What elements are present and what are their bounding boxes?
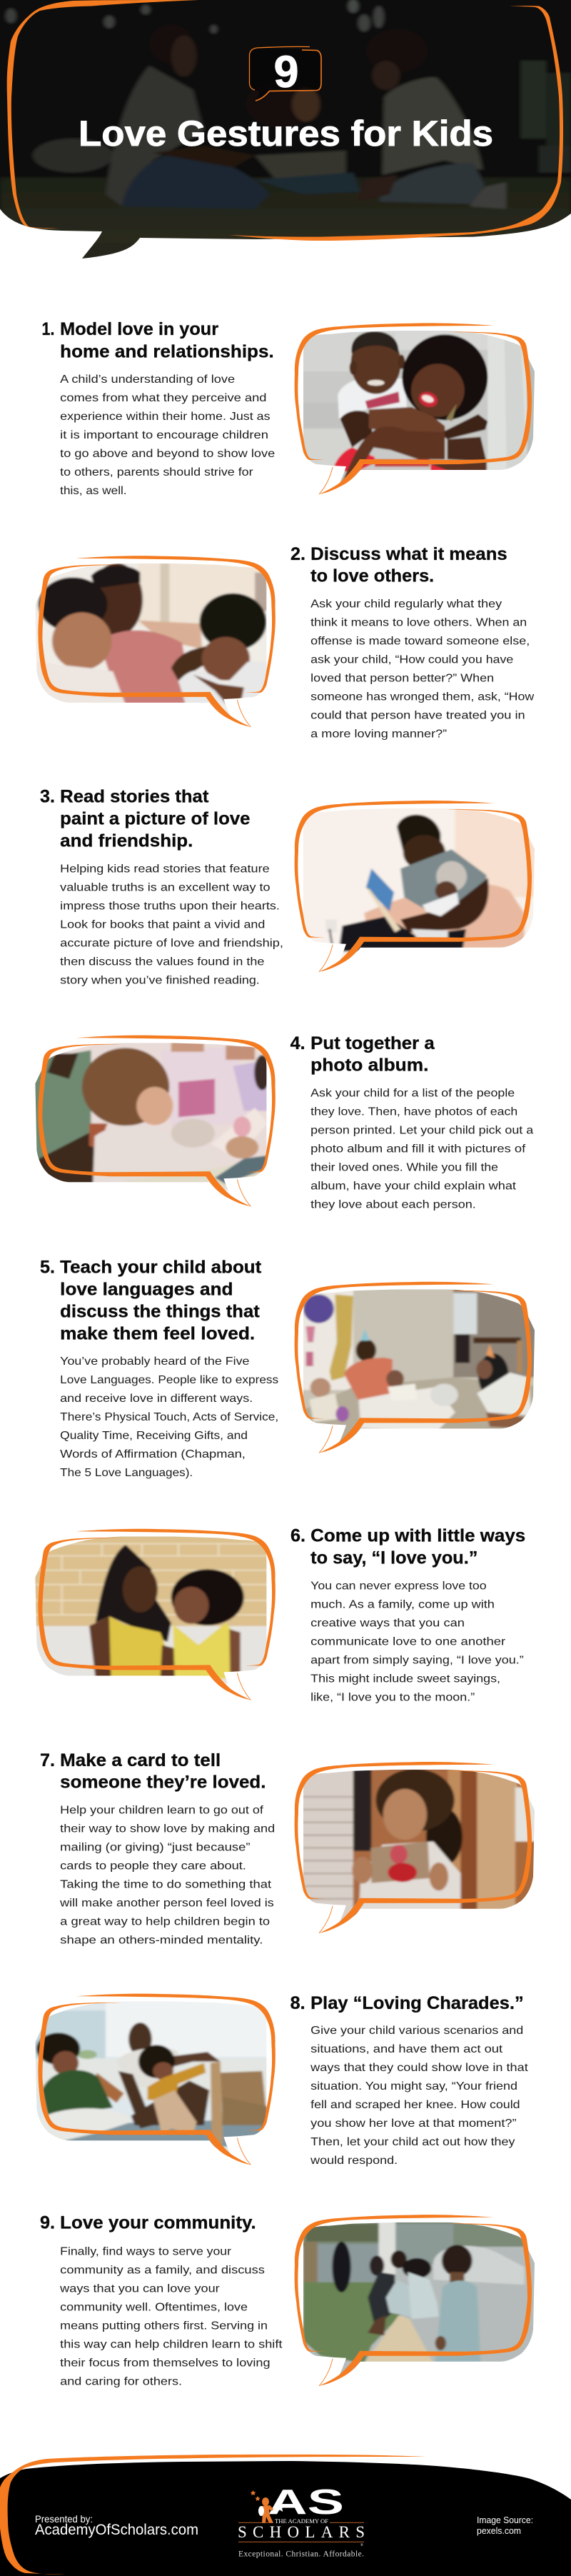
heading 8: 8.	[290, 1993, 305, 2013]
heading 7	[40, 1750, 266, 1793]
body text 3: impress those truths upon their hearts.	[60, 900, 280, 912]
body text 5: Words of Affirmation (Chapman,	[60, 1448, 246, 1460]
heading 3: 3.	[40, 787, 55, 807]
body text 7: Taking the time to do something that	[60, 1878, 272, 1890]
body text 7: their way to show love by making and	[60, 1823, 275, 1835]
body text 3: Look for books that paint a vivid and	[60, 918, 265, 931]
footer	[0, 2455, 571, 2576]
body text 2: someone has wronged them, ask, “How	[310, 691, 535, 703]
body text 8: would respond.	[310, 2155, 398, 2167]
heading 9: Love your community.	[60, 2212, 256, 2232]
body text 8: fell and scraped her knee. How could	[310, 2099, 520, 2111]
heading 5	[40, 1258, 262, 1343]
image source: Image Source:	[477, 2515, 533, 2525]
heading 9: 9.	[40, 2212, 55, 2232]
heading 6: 6.	[290, 1525, 305, 1545]
photo: family on curb in neighborhood	[303, 2222, 535, 2375]
heading 6	[290, 1525, 525, 1568]
body text 6: communicate love to one another	[310, 1635, 505, 1648]
photo: two sisters in yellow	[35, 1537, 267, 1684]
title: Love Gestures for Kids	[79, 114, 493, 154]
body text 6: This might include sweet sayings,	[310, 1673, 500, 1685]
body text 3: accurate picture of love and friendship,	[60, 937, 283, 949]
image source	[477, 2515, 533, 2536]
photo bubble 7	[291, 1762, 546, 1940]
panel: gesture 3	[40, 787, 546, 986]
header banner	[0, 0, 571, 272]
body text 9: their focus from themselves to loving	[60, 2357, 271, 2370]
body text 4: person printed. Let your child pick out a	[310, 1124, 533, 1136]
logo: The Academy of Scholars	[238, 2483, 365, 2558]
orange speech bubble outline	[295, 2215, 532, 2386]
body text 7: will make another person feel loved is	[59, 1897, 274, 1909]
body text 2: ask your child, “How could you have	[310, 653, 513, 666]
body text 9: Finally, find ways to serve your	[60, 2246, 231, 2258]
heading 7: 7.	[40, 1750, 55, 1770]
panel: gesture 1	[41, 319, 545, 500]
heading 1: Model love in your	[60, 319, 218, 339]
child	[246, 90, 305, 127]
photo: child with photo album	[35, 1043, 267, 1191]
image source: pexels.com	[477, 2525, 521, 2536]
orange speech bubble outline	[38, 1529, 276, 1700]
body text 6: creative ways that you can	[310, 1617, 465, 1629]
panel: gesture 2	[22, 544, 535, 740]
heading 1: home and relationships.	[60, 341, 274, 361]
body text 6: much. As a family, come up with	[310, 1598, 495, 1610]
orange speech bubble outline	[38, 556, 276, 727]
body text 8: situations, and have them act out	[310, 2043, 503, 2055]
photo bubble 3	[294, 801, 535, 972]
body text 9: this way can help children learn to shift	[60, 2338, 283, 2351]
body text 4	[310, 1087, 533, 1211]
photo bubble 8	[22, 1994, 277, 2173]
body text 6: like, “I love you to the moon.”	[310, 1691, 475, 1703]
photo bubble 1	[288, 323, 545, 500]
body text 1	[60, 374, 275, 497]
body text 2: think it means to love others. When an	[310, 616, 527, 628]
body text 8: Then, let your child act out how they	[310, 2136, 515, 2148]
heading 2: to love others.	[310, 566, 434, 586]
heading 4: Put together a	[310, 1033, 435, 1053]
man	[106, 66, 204, 206]
body text 1: to go above and beyond to show love	[60, 448, 275, 460]
photo: family birthday party	[303, 1290, 535, 1441]
heading 4: 4.	[290, 1033, 305, 1053]
body text 4: they love. Then, have photos of each	[310, 1106, 517, 1118]
body text 1: this, as well.	[60, 485, 127, 497]
logo name	[238, 2518, 365, 2558]
logo name: ®	[360, 2543, 363, 2547]
heading 1: 1.	[41, 319, 54, 339]
logo name: SCHOLARS	[238, 2523, 365, 2541]
orange speech bubble outline	[38, 1994, 276, 2165]
heading 6: Come up with little ways	[310, 1525, 525, 1545]
logo name: Exceptional. Christian. Affordable.	[238, 2550, 364, 2558]
body text 8: ways that they could show love in that	[310, 2062, 528, 2074]
body text 7: Help your children learn to go out of	[60, 1804, 264, 1816]
panel: gesture 8	[22, 1993, 528, 2173]
photo: girl holding handmade card	[303, 1770, 535, 1922]
body text 1: to others, parents should strive for	[60, 466, 253, 478]
body text 5: The 5 Love Languages).	[60, 1467, 193, 1479]
body text 5	[60, 1355, 278, 1479]
body text 3	[60, 863, 283, 986]
heading 5: discuss the things that	[60, 1302, 260, 1322]
heading 5: 5.	[40, 1258, 55, 1278]
presented by: AcademyOfScholars.com	[35, 2522, 198, 2538]
photo bubble 5	[291, 1282, 546, 1460]
body text 8: situation. You might say, “Your friend	[310, 2080, 517, 2093]
photo bubble 2	[22, 556, 277, 735]
heading 3	[40, 787, 251, 851]
body text 3: valuable truths is an excellent way to	[60, 881, 271, 893]
heading 4	[290, 1033, 435, 1076]
body text 1: it is important to encourage children	[60, 429, 268, 441]
number callout bubble: 9	[273, 47, 299, 97]
heading 3: and friendship.	[60, 831, 193, 851]
body text 8: you show her love at that moment?”	[310, 2118, 517, 2130]
body text 4: photo album and fill it with pictures of	[310, 1143, 526, 1155]
heading 8: Play “Loving Charades.”	[310, 1993, 524, 2013]
photo: father with two children	[36, 563, 267, 716]
heading 3: paint a picture of love	[60, 808, 251, 828]
heading 5: love languages and	[60, 1279, 233, 1299]
heading 5: Teach your child about	[60, 1258, 262, 1278]
heading 7: Make a card to tell	[60, 1750, 221, 1770]
body text 9: community as a family, and discuss	[60, 2265, 265, 2277]
body text 4: they love about each person.	[310, 1198, 476, 1211]
body text 6: apart from simply saying, “I love you.”	[310, 1654, 524, 1666]
presented by: Presented by:	[35, 2513, 93, 2525]
body text 2: could that person have treated you in	[310, 709, 525, 721]
body text 4: album, have your child explain what	[310, 1180, 517, 1192]
heading 4: photo album.	[310, 1056, 428, 1076]
heading 2: Discuss what it means	[310, 544, 507, 564]
body text 9: and caring for others.	[60, 2375, 182, 2388]
panel: gesture 5	[40, 1258, 546, 1479]
orange speech bubble outline	[295, 323, 532, 494]
heading 7: someone they’re loved.	[60, 1773, 266, 1793]
body text 7: mailing (or giving) “just because”	[60, 1841, 250, 1853]
icon: child with stars	[251, 2490, 285, 2523]
body text 2: offense is made toward someone else,	[310, 635, 530, 647]
body text 1: experience within their home. Just as	[60, 411, 271, 423]
body text 5: There’s Physical Touch, Acts of Service,	[60, 1411, 278, 1423]
body text 4: their loved ones. While you fill the	[310, 1161, 498, 1173]
footer orange outline	[0, 2455, 426, 2575]
body text 2: a more loving manner?”	[310, 728, 447, 740]
heading 5: make them feel loved.	[60, 1323, 255, 1343]
body text 5: Quality Time, Receiving Gifts, and	[60, 1430, 248, 1442]
body text 6	[310, 1580, 524, 1703]
body text 2: Ask your child regularly what they	[310, 598, 502, 610]
orange speech bubble outline	[295, 1762, 532, 1933]
footer black panel	[0, 2461, 571, 2576]
body text 9: ways that you can love your	[59, 2282, 220, 2295]
body text 9	[59, 2246, 283, 2388]
body text 5: You’ve probably heard of the Five	[60, 1355, 250, 1368]
header orange outline	[7, 0, 563, 241]
orange speech bubble outline	[295, 1282, 532, 1453]
body text 5: and receive love in different ways.	[60, 1393, 253, 1405]
body text 3: story when you’ve finished reading.	[60, 974, 260, 986]
header photo of family on grass	[0, 0, 571, 272]
body text 4: Ask your child for a list of the people	[310, 1087, 515, 1099]
heading 3: Read stories that	[60, 787, 209, 807]
photo: boy hugging mother	[303, 331, 535, 483]
panel: gesture 4	[22, 1033, 533, 1211]
panel: gesture 7	[40, 1750, 546, 1946]
body text 6: You can never express love too	[310, 1580, 487, 1592]
orange speech bubble outline	[38, 1036, 276, 1206]
body text 1: A child’s understanding of love	[60, 374, 235, 386]
body text 8: Give your child various scenarios and	[310, 2025, 523, 2037]
body text 7: cards to people they care about.	[60, 1860, 246, 1872]
body text 7: shape an others-minded mentality.	[60, 1934, 263, 1946]
body text 7: a great way to help children begin to	[60, 1915, 270, 1928]
body text 8	[310, 2025, 528, 2167]
body text 3: Helping kids read stories that feature	[60, 863, 270, 875]
heading 1	[41, 319, 274, 361]
presented by	[35, 2513, 198, 2538]
photo: father and children playing	[35, 2001, 267, 2153]
photo: father reading to baby	[303, 808, 535, 960]
body text 2	[310, 598, 535, 740]
panel: gesture 9	[40, 2212, 546, 2389]
body text 7	[59, 1804, 275, 1946]
body text 1: comes from what they perceive and	[60, 392, 266, 404]
logo monogram: AS	[268, 2483, 344, 2522]
logo name: THE ACADEMY OF	[275, 2518, 329, 2525]
panel: gesture 6	[22, 1525, 525, 1703]
heading 2: 2.	[290, 544, 305, 564]
number callout bubble	[250, 46, 321, 101]
heading 2	[290, 544, 507, 586]
orange speech bubble outline	[295, 801, 532, 972]
photo bubble 4	[22, 1036, 277, 1206]
body text 3: then discuss the values found in the	[60, 956, 265, 968]
body text 9: community well. Oftentimes, love	[60, 2301, 248, 2314]
body text 5: Love Languages. People like to express	[60, 1374, 278, 1386]
photo bubble 6	[22, 1529, 277, 1700]
heading 6: to say, “I love you.”	[310, 1548, 477, 1568]
woman	[366, 29, 428, 73]
body text 9: means putting others first. Serving in	[60, 2320, 268, 2332]
body text 2: loved that person better?” When	[310, 672, 494, 684]
photo bubble 9	[291, 2215, 546, 2389]
